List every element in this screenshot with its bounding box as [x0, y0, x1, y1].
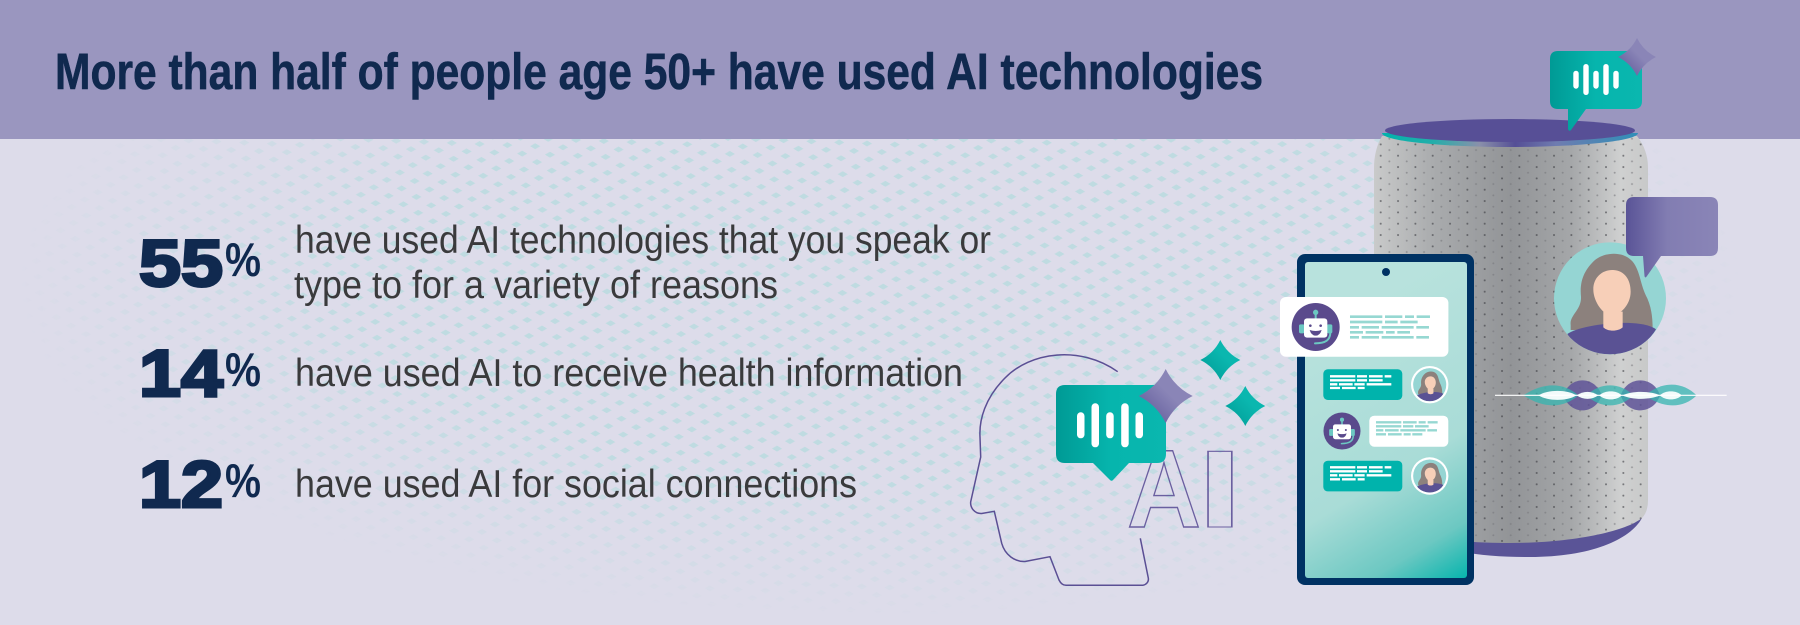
phone screen [1305, 262, 1467, 578]
phone frame [1297, 254, 1474, 585]
stat row: 14%: have used AI to receive health information [295, 352, 963, 395]
icon: teal sparkle upper [1200, 340, 1240, 380]
title: More than half of people age 50+ have used AI technologies [55, 43, 1263, 100]
waveform speech bubble [1056, 385, 1166, 481]
header band [0, 0, 1800, 139]
stat row: 12%: 12 [139, 447, 223, 521]
speaker grille dots [1374, 136, 1648, 543]
speaker light ring [1382, 133, 1638, 147]
stat row: 55%: 55 [139, 226, 223, 300]
AI outline lettering: A [1127, 428, 1201, 551]
background: diamond dot pattern [109, 139, 1380, 581]
phone [1280, 254, 1474, 585]
icon: purple sparkle [1139, 369, 1193, 423]
stat row: 55%: have used AI technologies that you speak or [295, 219, 991, 262]
AI outline lettering [1127, 427, 1243, 551]
phone camera [1382, 268, 1390, 276]
stat row: 12%: % [225, 454, 261, 507]
smart speaker [1374, 119, 1648, 557]
stat row: 12%: have used AI for social connections [295, 463, 857, 506]
chat bubble: bot reply [1323, 412, 1448, 450]
stat row: 14%: 14 [139, 336, 223, 410]
stat row: 55% [139, 219, 991, 307]
avatar: woman [1554, 242, 1666, 354]
chat card: bot large [1280, 297, 1448, 357]
sound wave [1495, 380, 1727, 410]
speaker base [1400, 500, 1642, 557]
stat row: 55%: % [225, 233, 261, 286]
chat bubble: user second message [1323, 457, 1448, 495]
speaker top [1385, 119, 1635, 142]
speaker body [1374, 136, 1648, 543]
stat row: 14% [139, 336, 963, 410]
icon: teal sparkle lower [1225, 386, 1265, 426]
icon: purple sparkle on header [1618, 38, 1656, 76]
chat bubble: user first message [1323, 366, 1448, 403]
purple speech bubble [1626, 197, 1718, 278]
stat row: 14%: % [225, 343, 261, 396]
top waveform speech bubble [1550, 51, 1642, 131]
stat row: 12% [139, 447, 857, 521]
AI outline lettering: I [1197, 427, 1243, 551]
icon: head outline with AI [971, 340, 1265, 585]
head outline [971, 355, 1148, 585]
stat row: 55%: type to for a variety of reasons [294, 264, 778, 307]
